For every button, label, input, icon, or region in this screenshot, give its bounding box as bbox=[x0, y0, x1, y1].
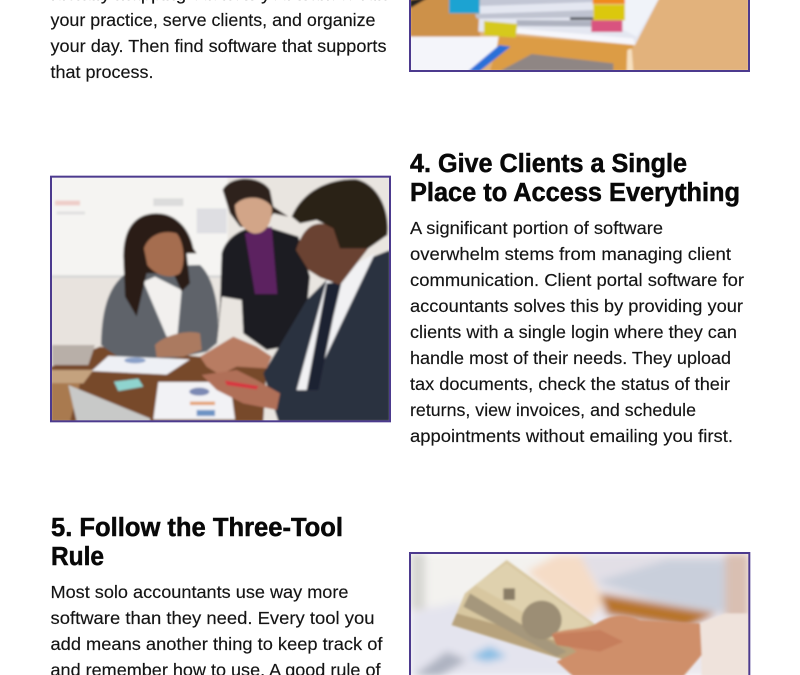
text block: step 4 paragraph: returns, view invoices, and schedule bbox=[410, 400, 696, 420]
heading: step 5 bbox=[51, 514, 343, 571]
text block: step 4 paragraph bbox=[410, 218, 744, 446]
text block: step 5 paragraph: add means another thing to keep track of bbox=[50, 634, 383, 654]
photo: hand holding a stack of dollar bills bbox=[410, 553, 749, 675]
papers and hands bbox=[92, 356, 190, 375]
text block: step 4 paragraph: clients with a single login where they can bbox=[410, 322, 737, 342]
heading: step 5: 5. Follow the Three-Tool bbox=[51, 514, 343, 542]
text block: step 3 closing paragraph: your practice, serve clients, and organize bbox=[50, 10, 376, 30]
heading: step 4 bbox=[410, 150, 740, 207]
text block: step 3 closing paragraph bbox=[50, 0, 388, 82]
woman left bbox=[101, 265, 218, 358]
text block: step 5 paragraph: software than they need. Every tool you bbox=[50, 608, 374, 628]
photo: three colleagues talking over charts at a table bbox=[51, 177, 390, 421]
text block: step 3 closing paragraph: that process. bbox=[50, 62, 154, 82]
text block: step 4 paragraph: A significant portion of software bbox=[410, 218, 663, 238]
heading: step 4: 4. Give Clients a Single bbox=[410, 150, 687, 178]
text block: step 4 paragraph: appointments without emailing you first. bbox=[410, 426, 733, 446]
man right bbox=[263, 250, 390, 421]
heading: step 5: Rule bbox=[51, 543, 104, 571]
heading: step 4: Place to Access Everything bbox=[410, 179, 740, 207]
text block: step 4 paragraph: handle most of their needs. They upload bbox=[410, 348, 731, 368]
text block: step 4 paragraph: accountants solves this by providing your bbox=[410, 296, 743, 316]
text block: step 5 paragraph: Most solo accountants use way more bbox=[50, 582, 348, 602]
text block: step 3 closing paragraph: your day. Then find software that supports bbox=[50, 36, 387, 56]
text block: step 4 paragraph: overwhelm stems from managing client bbox=[410, 244, 731, 264]
text block: step 4 paragraph: communication. Client portal software for bbox=[410, 270, 744, 290]
text block: step 4 paragraph: tax documents, check the status of their bbox=[410, 374, 730, 394]
text block: step 5 paragraph bbox=[50, 582, 383, 675]
woman centre bbox=[217, 226, 310, 350]
photo: stacked paper files with colored tabs on a wooden desk bbox=[410, 0, 749, 71]
